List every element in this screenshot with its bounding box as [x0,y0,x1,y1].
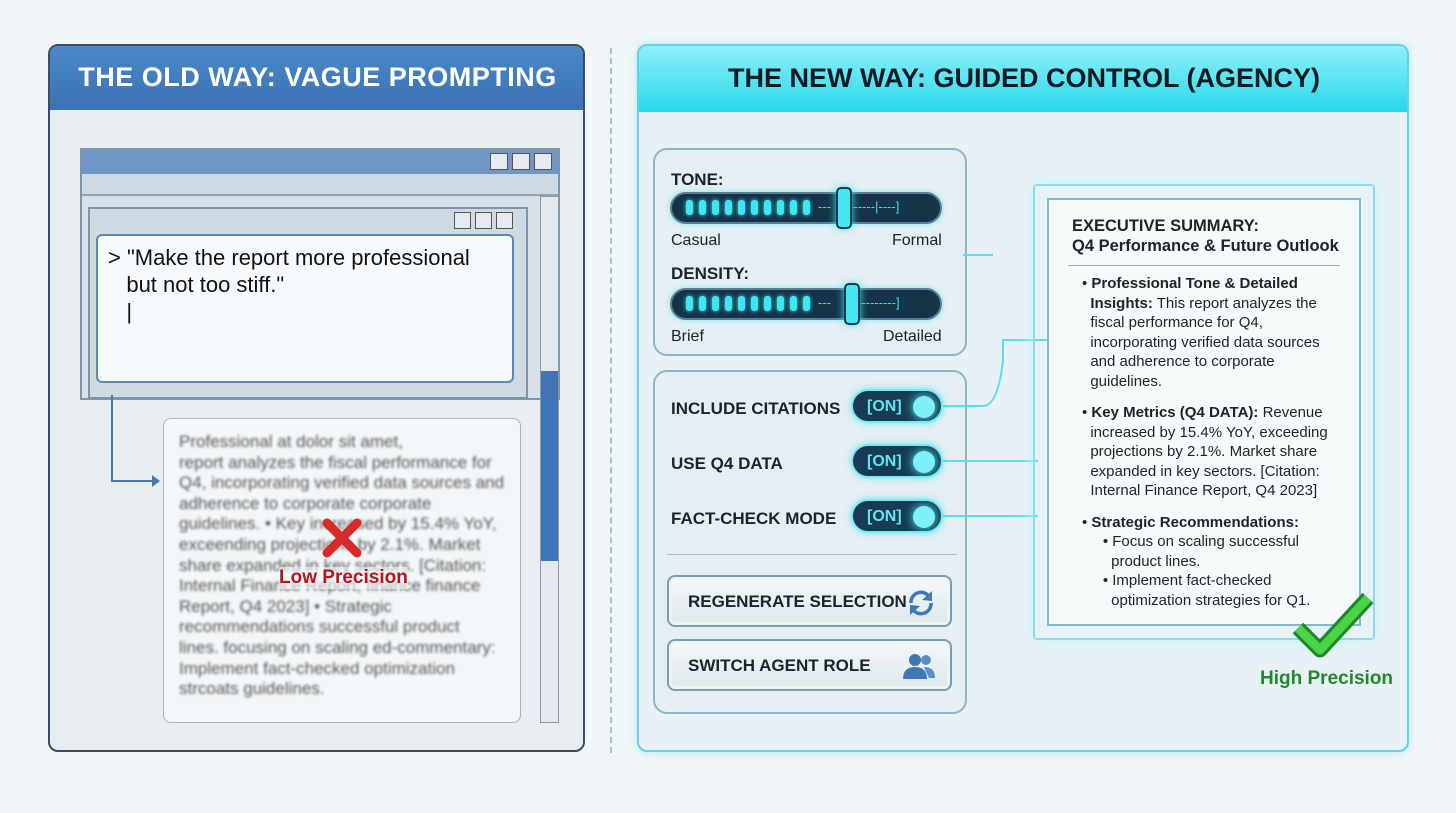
executive summary card: • Focus on scaling successful [1103,533,1299,550]
prompt text box: | [126,299,132,324]
toggles panel: FACT-CHECK MODE [671,509,836,528]
blurry output bubble: lines. focusing on scaling ed-commentary: [179,638,496,657]
sliders panel: Detailed [883,328,942,345]
button: regenerate: REGENERATE SELECTION [688,592,907,611]
toggle: q4 [851,444,943,478]
right title: THE NEW WAY: GUIDED CONTROL (AGENCY) [728,63,1320,93]
outer window [80,148,560,400]
left panel [48,44,585,752]
button: switch agent: SWITCH AGENT ROLE [688,656,871,675]
toggle: fact-check [851,499,943,533]
executive summary card [1047,198,1361,626]
executive summary card: • Professional Tone & Detailed [1082,275,1298,292]
sliders panel: Casual [671,232,721,249]
executive summary card: projections by 2.1%. Market share [1090,443,1317,460]
executive summary card: EXECUTIVE SUMMARY: [1072,217,1259,235]
blurry output bubble: share expanded in key sectors. [Citation: [179,556,486,575]
executive summary card: product lines. [1111,552,1200,570]
density slider: --- ----------] [818,295,900,310]
sliders panel: DENSITY: [671,264,749,283]
blurry output bubble [163,418,521,723]
blurry output bubble: Implement fact-checked optimization [179,659,455,678]
executive summary card: incorporating verified data sources [1090,334,1320,350]
density slider [670,288,942,320]
executive summary card: • Strategic Recommendations: [1082,514,1299,530]
executive summary card: guidelines. [1090,372,1162,390]
right panel [637,44,1409,752]
high precision label: High Precision [1260,668,1393,689]
toggle: fact-check: [ON] [867,508,902,525]
left title [50,46,585,110]
icon: red x [322,518,362,558]
divider [610,48,612,753]
executive summary card: increased by 15.4% YoY, exceeding [1090,424,1328,440]
blurry output bubble: guidelines. • Key increased by 15.4% YoY, [179,514,497,533]
executive summary card: • Implement fact-checked [1103,572,1272,589]
icon: green check [1292,593,1374,658]
scrollbar [540,196,559,723]
executive summary card: Insights: This report analyzes the [1090,294,1317,312]
inner window [88,207,528,399]
left title: THE OLD WAY: VAGUE PROMPTING [78,62,557,92]
executive summary card: fiscal performance for Q4, [1090,314,1263,331]
blurry output bubble: recommendations successful product [179,617,460,636]
tone slider: --- ------|----] [818,199,899,214]
executive summary card: optimization strategies for Q1. [1111,592,1310,608]
blurry output bubble: Professional at dolor sit amet, [179,432,403,451]
sliders panel: Formal [892,232,942,249]
blurry output bubble: Report, Q4 2023] • Strategic [179,597,392,616]
toggle: citations: [ON] [867,398,902,415]
executive summary card: Internal Finance Report, Q4 2023] [1090,482,1317,499]
sliders panel: Brief [671,328,704,345]
prompt text box: > "Make the report more professional [108,245,470,270]
sliders panel [653,148,967,356]
blurry output bubble: strcoats guidelines. [179,679,325,698]
prompt text box: but not too stiff." [126,272,284,297]
executive summary card: and adherence to corporate [1090,353,1275,370]
toggle: citations [851,389,943,423]
blurry output bubble: Internal Finance Report, finance finance [179,576,480,595]
blurry output bubble: Q4, incorporating verified data sources and [179,473,504,492]
toggles panel: INCLUDE CITATIONS [671,399,840,418]
prompt text box [96,234,514,383]
tone slider [670,192,942,224]
sliders panel: TONE: [671,170,724,189]
button: switch agent [667,639,952,691]
low precision label: Low Precision [279,567,408,588]
connector lines [943,254,1047,517]
executive summary card: • Key Metrics (Q4 DATA): Revenue [1082,404,1323,421]
toggle: q4: [ON] [867,453,902,470]
arrow connector [111,395,160,487]
executive summary card: Q4 Performance & Future Outlook [1072,237,1339,255]
blurry output bubble: report analyzes the fiscal performance for [179,453,492,472]
button: regenerate [667,575,952,627]
blurry output bubble: exceending projections by 2.1%. Market [179,535,480,554]
right title [639,46,1409,112]
executive summary card: expanded in key sectors. [Citation: [1090,462,1320,480]
blurry output bubble: adherence to corporate corporate [179,494,431,513]
summary frame decoration [1033,184,1375,640]
toggles panel: USE Q4 DATA [671,454,783,473]
toggles panel [653,370,967,714]
